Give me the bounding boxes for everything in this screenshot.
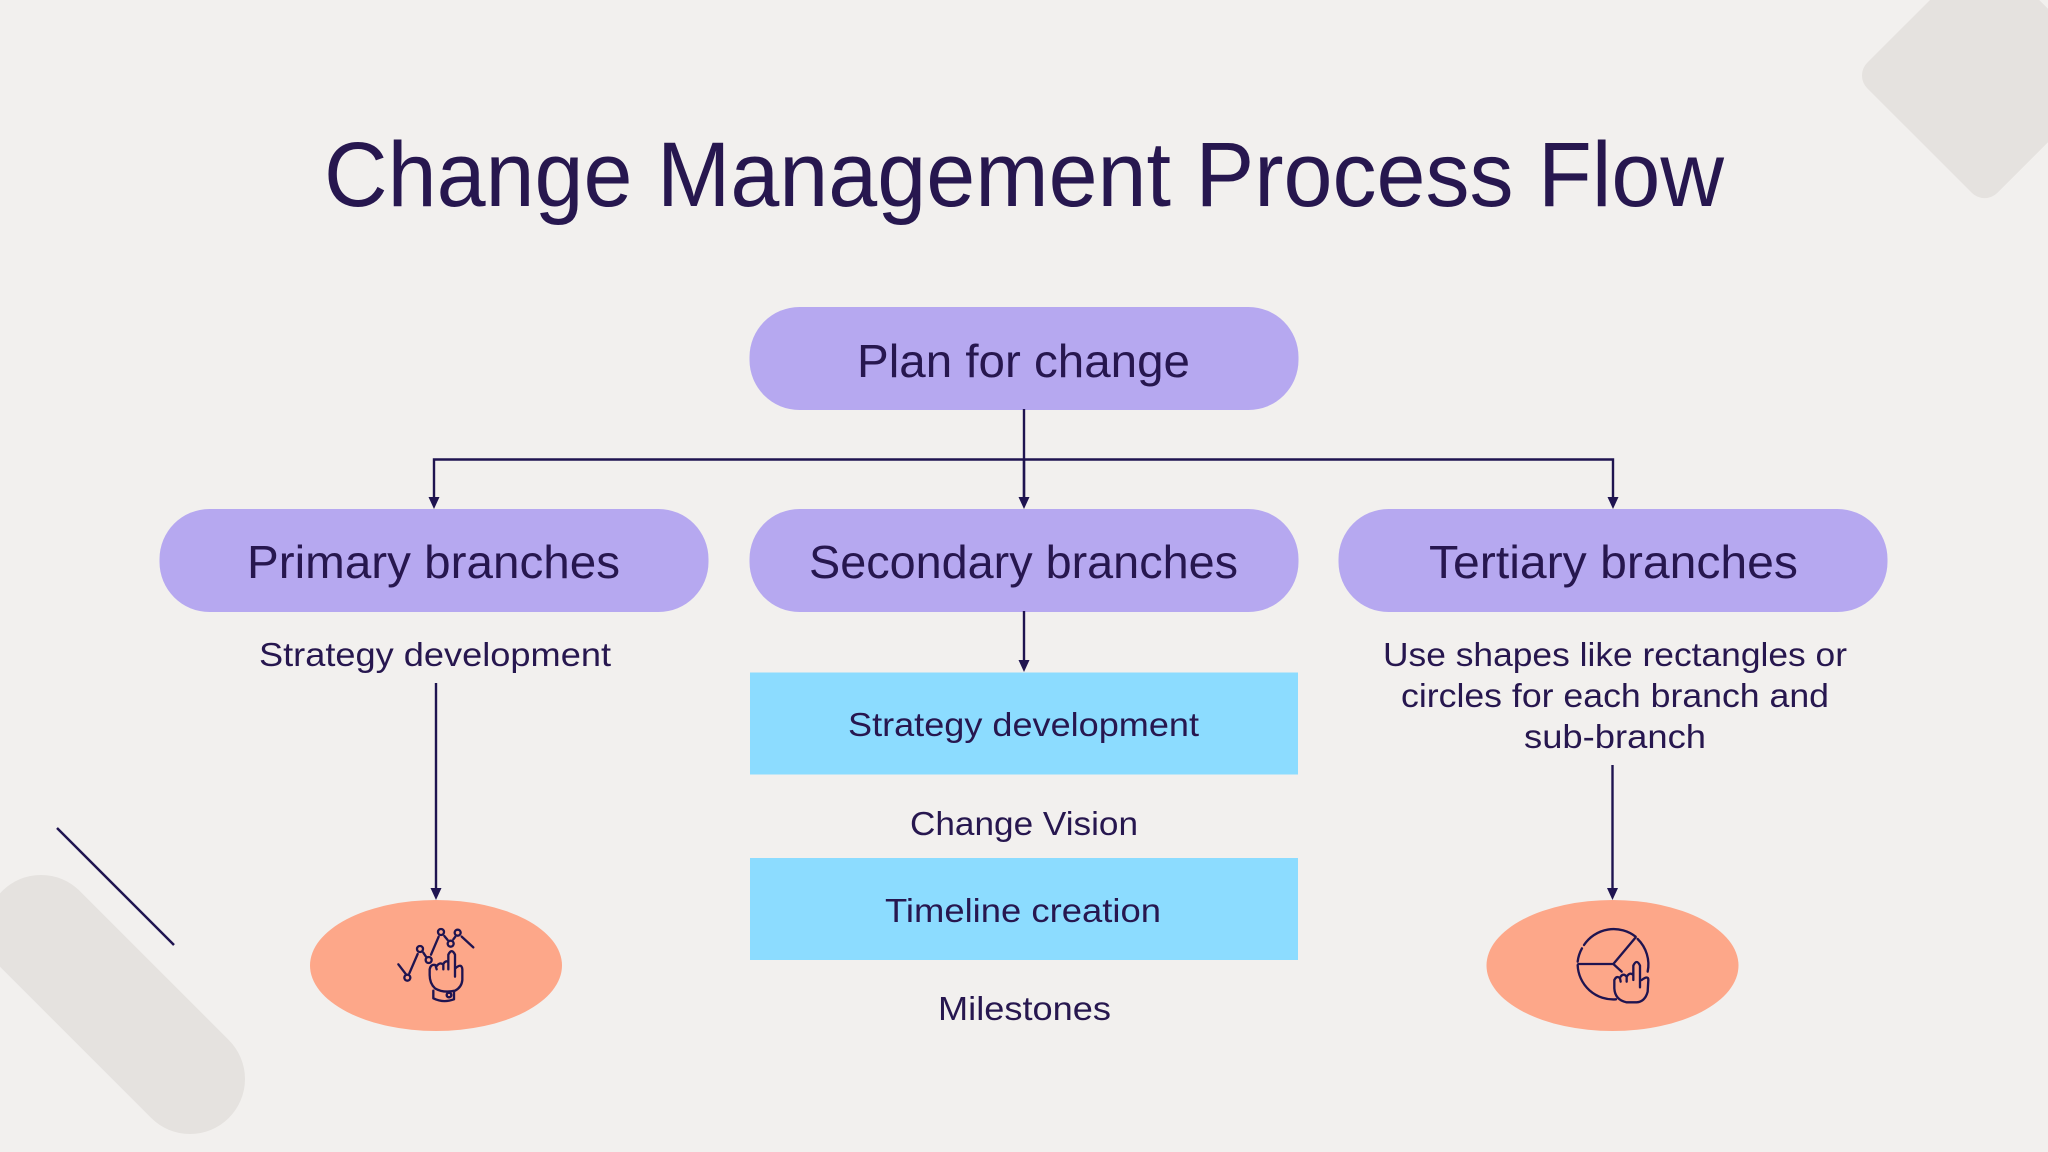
node: plan for change: Plan for change: [857, 335, 1190, 387]
icon ellipse: finger on pie chart: [1486, 900, 1738, 1031]
text: tertiary description: circles for each branch and: [1401, 678, 1829, 715]
node: secondary branches: [750, 509, 1298, 612]
icon ellipse: finger on line chart: [310, 900, 562, 1031]
text: change vision: Change Vision: [910, 806, 1138, 843]
arrow: secondary to box: [1018, 611, 1030, 672]
node: primary branches: Primary branches: [247, 536, 620, 588]
node: tertiary branches: Tertiary branches: [1429, 536, 1798, 588]
node: tertiary branches: [1338, 509, 1888, 612]
arrow: tertiary to icon: [1607, 765, 1618, 900]
box: timeline creation: [750, 858, 1298, 960]
decoration: bottom-left capsule: [41, 930, 190, 1079]
decoration: top-right rounded square: [1854, 0, 2048, 206]
title: Change Management Process Flow: [324, 124, 1725, 226]
node: plan for change: [750, 307, 1298, 410]
panel: secondary branches: [750, 509, 1298, 1028]
decoration: diagonal line: [57, 828, 174, 945]
box: timeline creation: Timeline creation: [885, 893, 1161, 930]
box: strategy development: [750, 672, 1298, 774]
panel: primary branches: [160, 509, 708, 1031]
arrow: primary to icon: [430, 683, 442, 900]
text: tertiary description: sub-branch: [1524, 719, 1706, 756]
node: primary branches: [160, 509, 708, 612]
connector: plan to three branches: [428, 409, 1618, 509]
text: tertiary description: [1383, 637, 1847, 756]
text: tertiary description: Use shapes like rectangles or: [1383, 637, 1847, 674]
node: secondary branches: Secondary branches: [809, 536, 1238, 588]
box: strategy development: Strategy development: [848, 707, 1200, 744]
panel: tertiary branches: [1338, 509, 1888, 1031]
text: strategy development: Strategy development: [259, 637, 612, 674]
text: milestones: Milestones: [938, 991, 1111, 1028]
